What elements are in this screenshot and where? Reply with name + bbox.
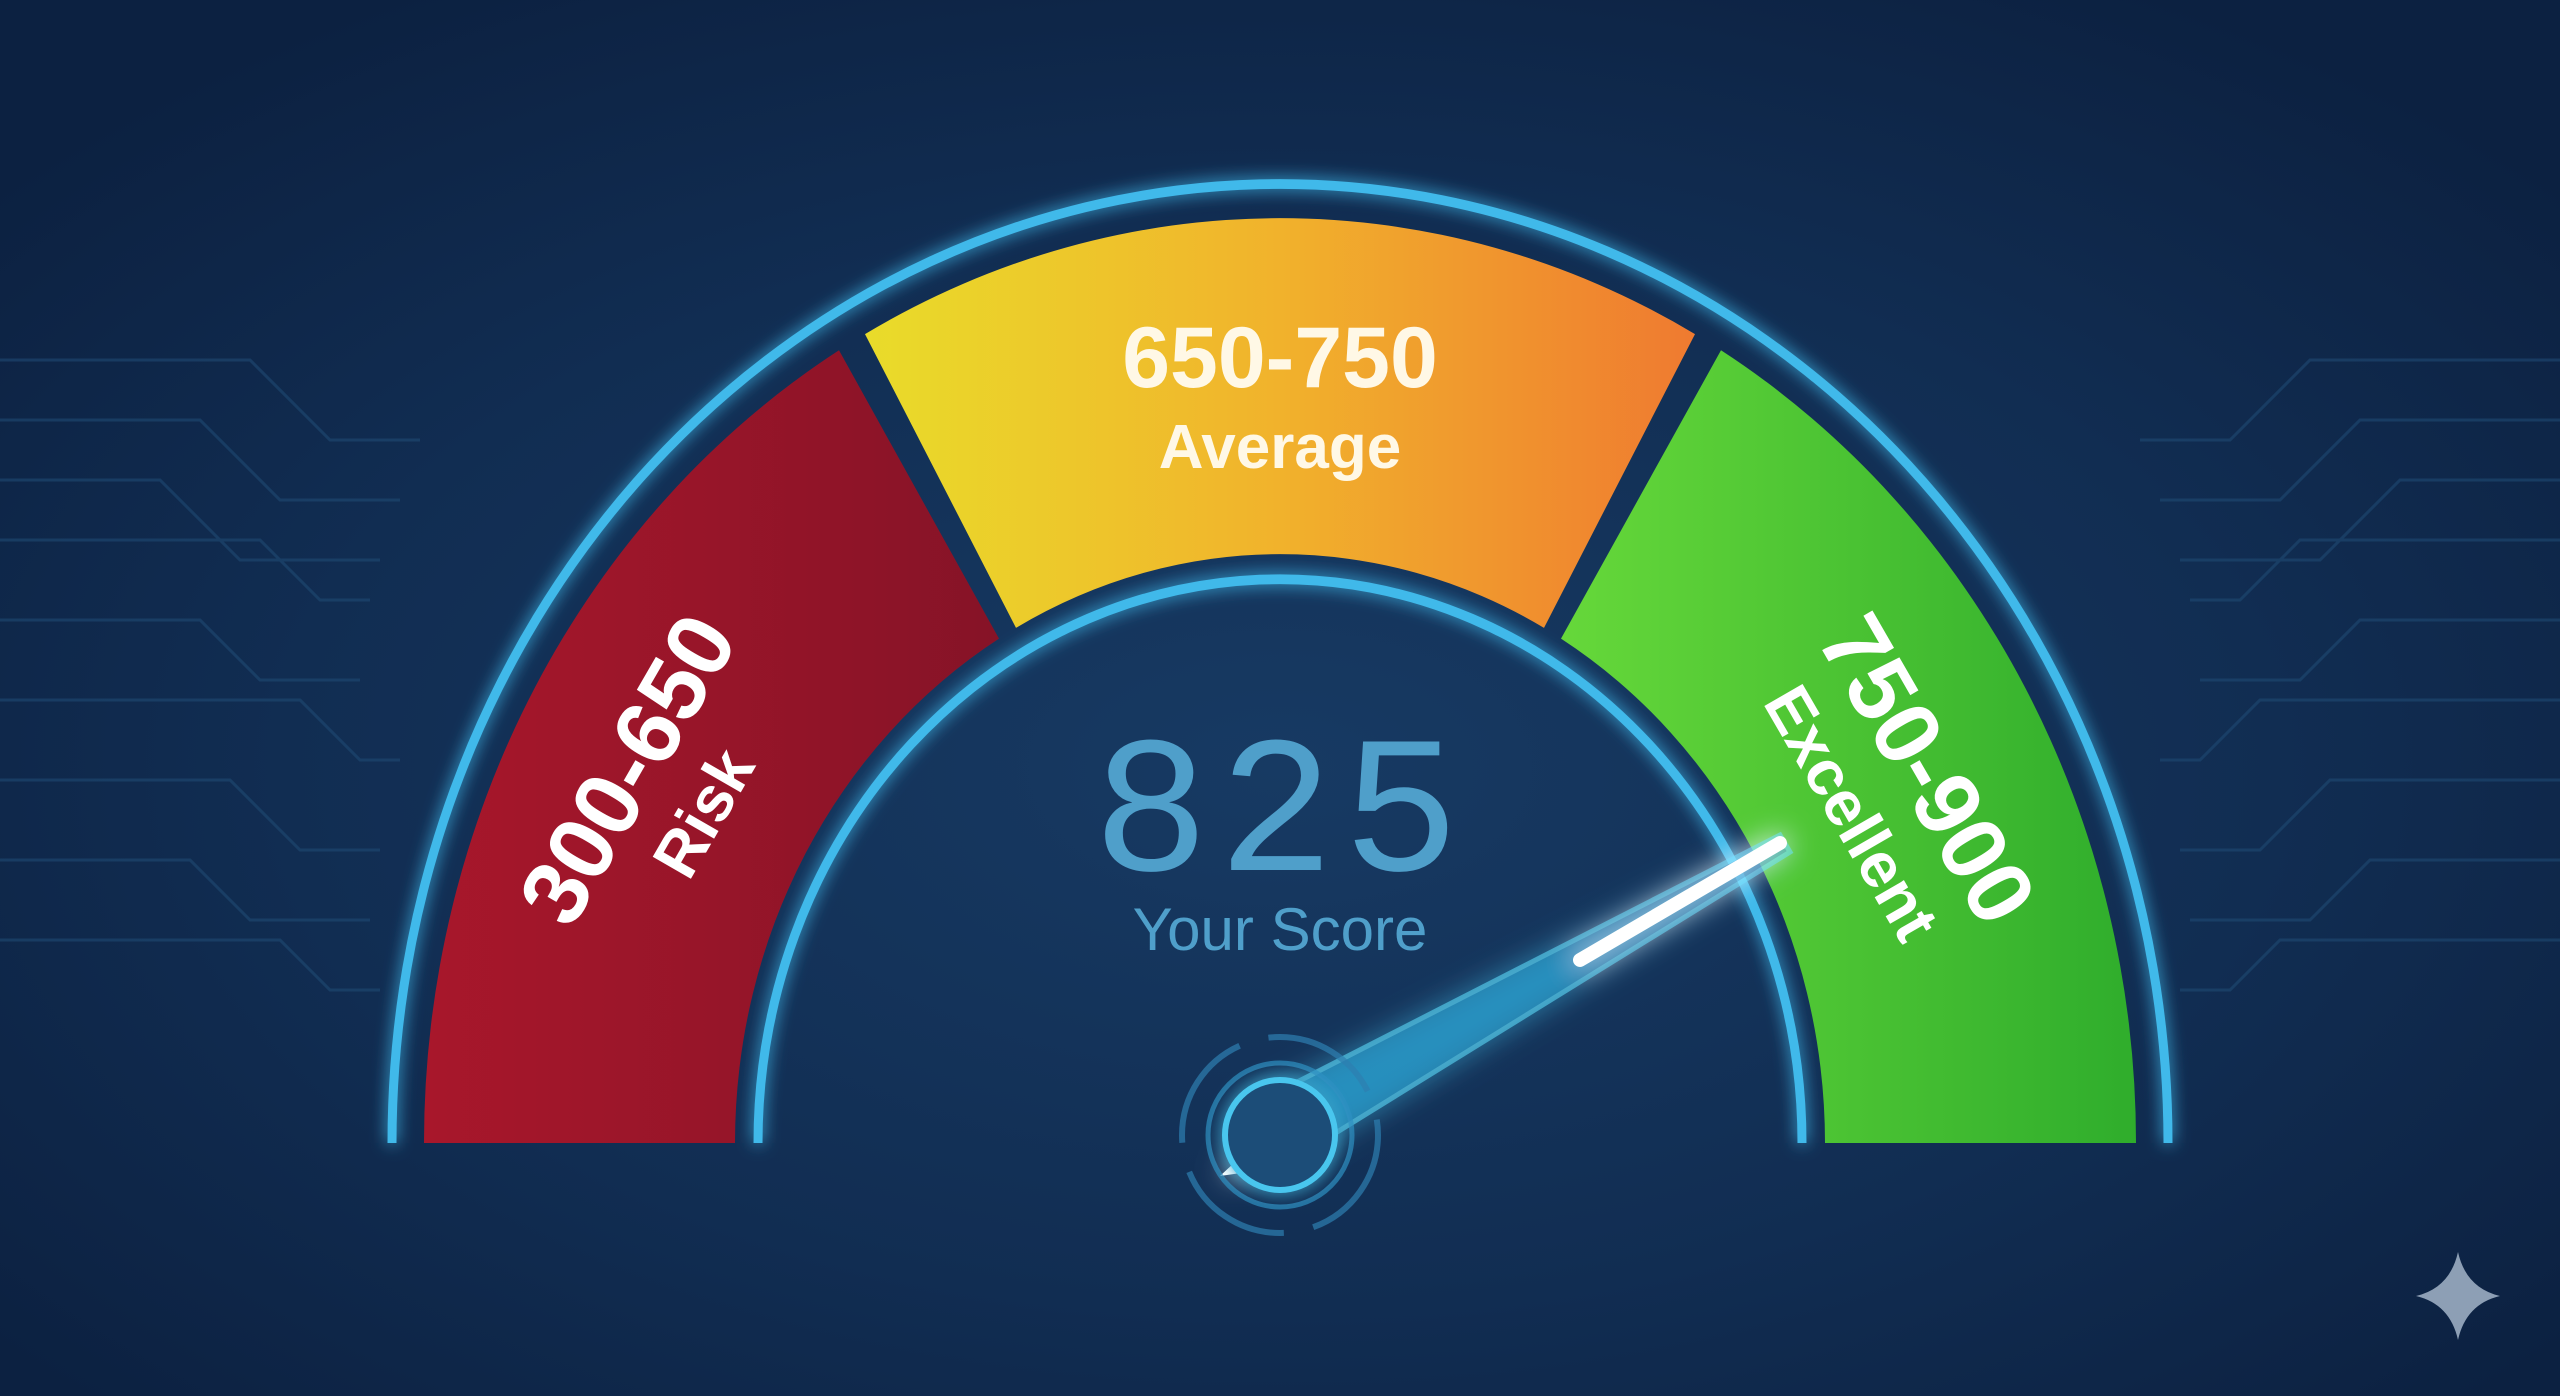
score value: 825	[1092, 708, 1468, 929]
gauge	[392, 184, 2168, 1143]
label: average: 650-750	[1122, 310, 1438, 406]
label: risk: 300-650	[500, 598, 757, 941]
icon: sparkle	[2416, 1252, 2500, 1340]
label: average	[1122, 310, 1438, 482]
segment: average	[865, 218, 1695, 628]
label: risk: Risk	[639, 736, 769, 890]
outer ring	[392, 184, 2168, 1143]
score label: Your Score	[1133, 896, 1427, 963]
segment: excellent	[1561, 350, 2136, 1143]
label: excellent: 750-900	[1798, 598, 2055, 941]
hub	[1182, 1037, 1378, 1233]
label: average: Average	[1159, 413, 1401, 482]
needle	[1220, 835, 1790, 1176]
inner ring	[758, 579, 1802, 1143]
segment: risk	[424, 350, 999, 1143]
label: excellent: Excellent	[1750, 673, 1953, 953]
